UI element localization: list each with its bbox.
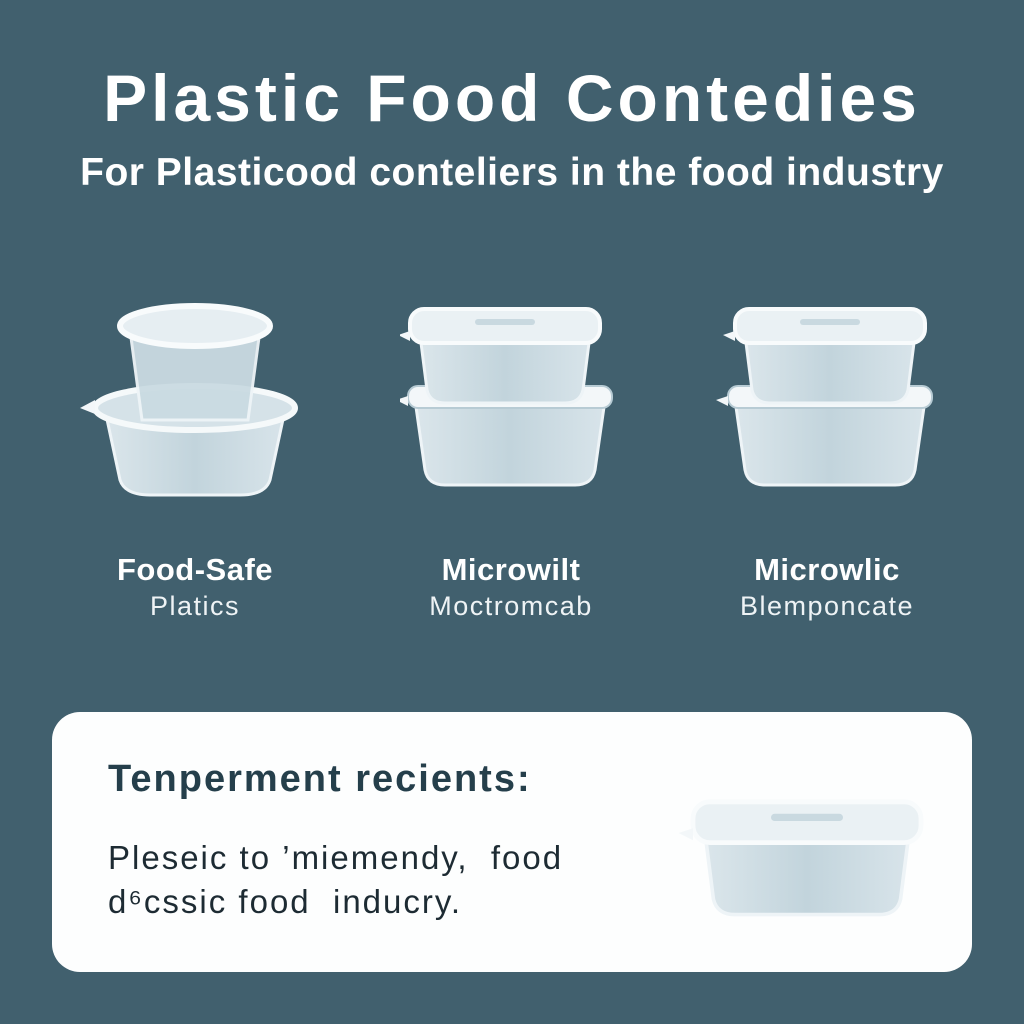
panel body text: Pleseic to ’miemendy, food (108, 839, 563, 876)
icon: rounded stacked containers (716, 307, 933, 486)
label: microwilt (429, 552, 593, 621)
label: microwilt: Moctromcab (429, 591, 593, 621)
subtitle: For Plasticood conteliers in the food industry (80, 151, 944, 194)
label: microwlic: Microwlic (754, 552, 900, 587)
icon: panel container (680, 804, 918, 916)
panel: bottom info (52, 712, 972, 972)
icon: square stacked containers (400, 307, 613, 486)
panel body text: d⁶cssic food inducry. (108, 883, 462, 920)
label: microwilt: Microwilt (442, 552, 580, 587)
label: food-safe (117, 552, 273, 621)
panel heading: Tenperment recients: (108, 758, 532, 800)
icon: round containers (80, 303, 298, 496)
label: food-safe: Platics (150, 591, 240, 621)
panel body text (108, 839, 563, 920)
label: microwlic: Blemponcate (740, 591, 914, 621)
label: food-safe: Food-Safe (117, 552, 273, 587)
label: microwlic (740, 552, 914, 621)
title: Plastic Food Contedies (103, 61, 921, 135)
